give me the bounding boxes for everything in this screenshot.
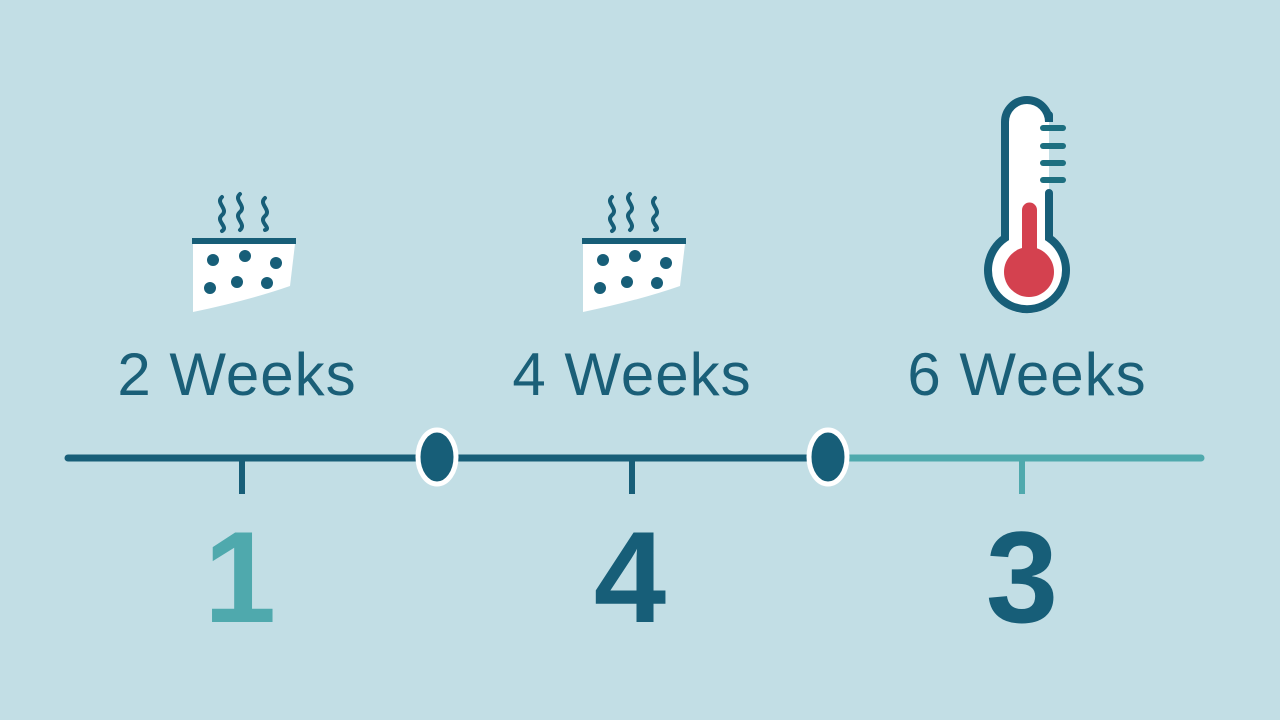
number: 3: 3 bbox=[986, 504, 1058, 650]
number: 4: 4 bbox=[594, 504, 666, 650]
timeline bbox=[68, 430, 1201, 494]
icon: thermometer bbox=[987, 100, 1067, 313]
icon: steaming dish 2 bbox=[582, 194, 686, 312]
icon: steaming dish 1 bbox=[192, 194, 296, 312]
label: 4 Weeks: 4 Weeks bbox=[512, 341, 752, 408]
label: 2 Weeks: 2 Weeks bbox=[117, 341, 357, 408]
number: 1: 1 bbox=[204, 504, 276, 650]
label: 6 Weeks: 6 Weeks bbox=[907, 341, 1147, 408]
